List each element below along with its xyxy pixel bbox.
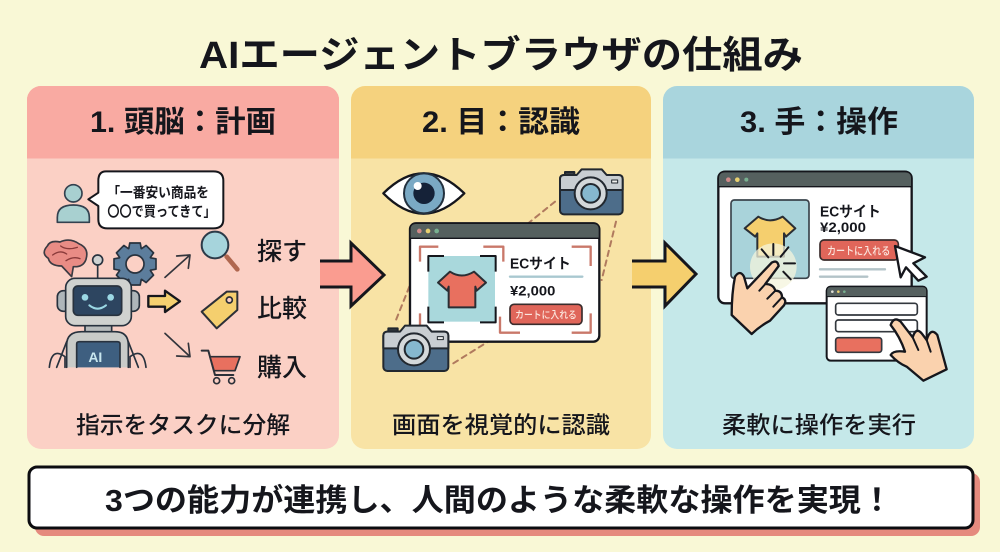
caption: visual recognition: 画面を視覚的に認識: [392, 412, 610, 438]
red focus brackets: [420, 247, 591, 333]
image thumbnail: [731, 200, 809, 278]
arrow: up to search: [165, 255, 190, 277]
add to cart button: [510, 304, 582, 324]
image thumbnail: [428, 256, 495, 322]
label: search: 探す: [257, 238, 307, 266]
icon: camera bottom left: [383, 326, 448, 371]
icon: user: [57, 185, 89, 222]
icon: typing hand: [891, 319, 947, 381]
icon: robot: AI: [88, 349, 102, 365]
heading: 3. hand operation: 3. 手：操作: [740, 106, 898, 139]
arrow: to compare: [148, 291, 180, 312]
caption: flexible operation: 柔軟に操作を実行: [722, 412, 916, 438]
browser window: ¥2,000: [820, 219, 866, 235]
label: purchase: 購入: [257, 354, 307, 382]
icon: price tag: [202, 292, 237, 328]
speech bubble: 「一番安い商品を: [107, 184, 209, 200]
speech bubble: 〇〇で買ってきて」: [107, 204, 216, 220]
icon: brain: [44, 240, 87, 277]
arrow: down to purchase: [165, 333, 190, 357]
browser window: カートに入れる: [515, 310, 577, 322]
caption: decompose into tasks: 指示をタスクに分解: [76, 412, 290, 438]
label: compare: 比較: [257, 295, 307, 323]
browser window: ¥2,000: [510, 282, 556, 298]
icon: pointing hand: [732, 262, 785, 334]
heading: 2. eye recognition: 2. 目：認識: [422, 106, 580, 139]
panel: 3 hand operation: [663, 86, 974, 449]
icon: camera top right: [560, 169, 623, 214]
speech bubble: [88, 171, 223, 228]
icon: magnifier: [202, 232, 237, 269]
product text: ECサイト: [510, 256, 571, 273]
arrow: step 2 to step 3: [632, 243, 696, 306]
illustration: recognition: [383, 169, 623, 371]
black focus brackets: [428, 256, 496, 322]
icon: red t-shirt: [438, 272, 486, 307]
heading: 1. brain planning: 1. 頭脳：計画: [90, 106, 276, 139]
summary banner: [29, 467, 980, 536]
product text: ECサイト: [820, 204, 881, 221]
arrow: step 1 to step 2: [320, 243, 384, 306]
click burst: [762, 244, 795, 279]
icon: mouse cursor: [895, 246, 927, 281]
dashed capture lines: [396, 202, 616, 363]
icon: cart: [202, 351, 240, 384]
illustration: operation: [718, 172, 947, 381]
panel: 1 brain planning: [27, 86, 339, 449]
browser window: カートに入れる: [827, 244, 890, 257]
browser window: [410, 223, 599, 342]
icon: gear: [114, 243, 156, 285]
icon: robot: [49, 255, 146, 367]
title: AIエージェントブラウザの仕組み: [199, 34, 803, 77]
panel: 2 eye recognition: [351, 86, 651, 449]
icon: yellow t-shirt: [745, 217, 795, 257]
icon: eye: [383, 173, 464, 214]
click glow: [750, 243, 797, 290]
browser window: [718, 172, 912, 303]
summary banner: 3つの能力が連携し、人間のような柔軟な操作を実現！: [105, 483, 893, 518]
illustration: planning: [44, 171, 240, 384]
add to cart button: [820, 240, 898, 260]
small form window: [827, 287, 927, 361]
